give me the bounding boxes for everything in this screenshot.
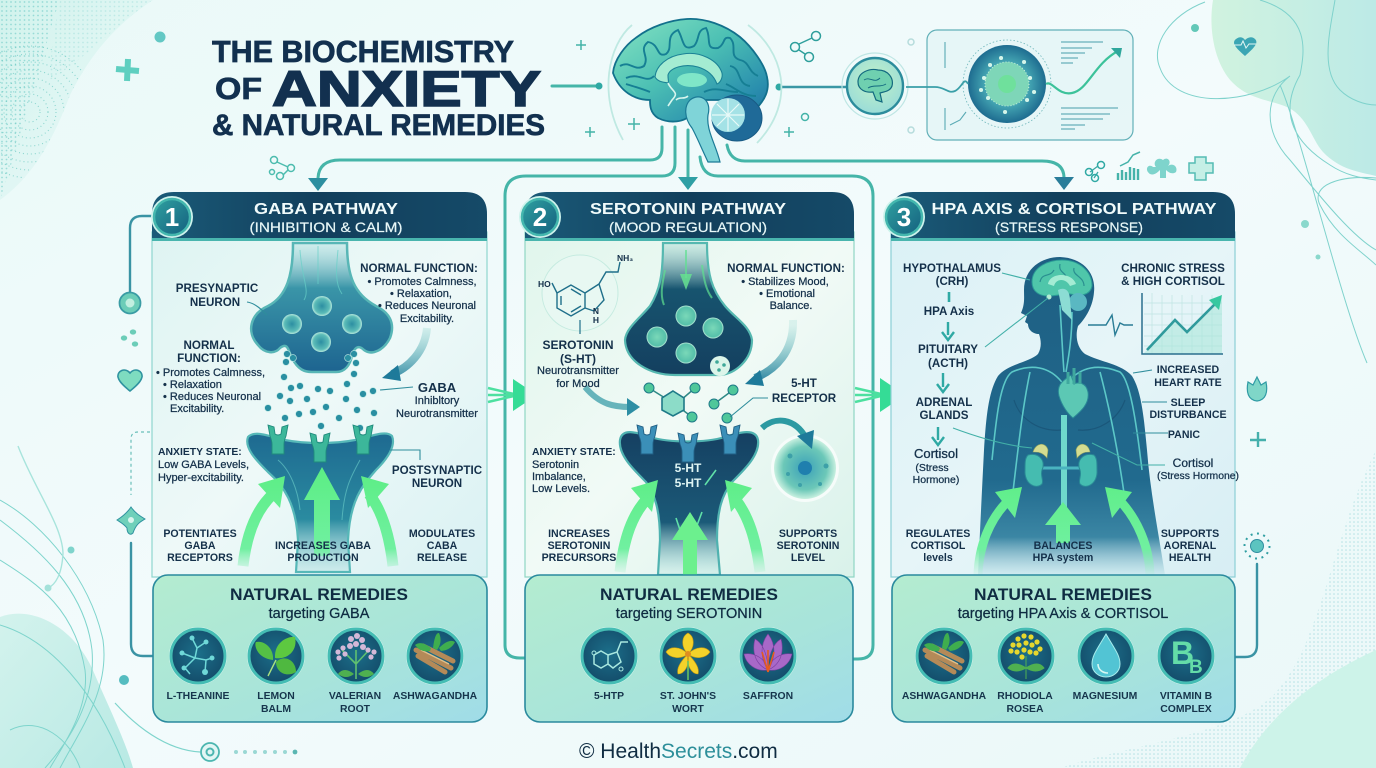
number badge 1	[151, 196, 193, 238]
arrow: panel 1 to panel 2	[488, 379, 537, 411]
remedy arrows	[978, 487, 1150, 575]
left normal function text: • Reduces Neuronal	[163, 391, 261, 403]
remedy action labels: SUPPORTS	[1161, 528, 1219, 540]
anxiety state text	[532, 447, 616, 495]
remedy action labels: CABA	[427, 540, 458, 552]
HPA axis steps: Cortisol	[914, 446, 958, 461]
panel header: GABA PATHWAY	[254, 201, 398, 218]
symptom labels: DISTURBANCE	[1149, 409, 1227, 421]
presynaptic label	[176, 282, 267, 315]
left normal function text: • Promotes Calmness,	[156, 367, 265, 379]
number badge 2	[519, 196, 561, 238]
left normal function text: NORMAL	[184, 339, 234, 352]
remedy action labels: RELEASE	[417, 552, 467, 564]
serotonin molecules	[644, 383, 738, 423]
remedy arrows	[243, 467, 393, 566]
icon: 5-HTP	[580, 627, 638, 685]
number badge 3	[883, 196, 925, 238]
postsynaptic label: POSTSYNAPTIC	[392, 464, 483, 477]
symptom labels	[1133, 364, 1239, 482]
panel header: (INHIBITION & CALM)	[250, 219, 402, 235]
natural remedies box GABA: ASHWAGANDHA	[393, 691, 478, 702]
symptom labels: HEART RATE	[1154, 377, 1222, 389]
remedy action labels: PRECURSORS	[542, 552, 616, 564]
remedy action labels: BALANCES	[1034, 540, 1092, 552]
remedy action labels	[906, 528, 1219, 564]
natural remedies box HPA: MAGNESIUM	[1073, 691, 1137, 702]
panel: HPA axis and cortisol pathway	[883, 192, 1239, 722]
left normal function text: Excitability.	[170, 403, 224, 415]
5-HT receptor label: RECEPTOR	[772, 392, 837, 405]
left normal function text	[156, 339, 265, 415]
natural remedies box serotonin: 5-HTP	[594, 691, 624, 702]
icon: rhodiola rosea	[997, 627, 1055, 685]
leader lines	[953, 273, 1165, 465]
GABA label: GABA	[418, 380, 457, 395]
HPA axis steps: (CRH)	[936, 275, 969, 288]
remedy action labels: LEVEL	[791, 552, 826, 564]
HPA axis steps: (ACTH)	[928, 357, 968, 370]
natural remedies box serotonin	[525, 575, 853, 722]
HPA axis steps: (Stress	[915, 462, 949, 474]
remedy action labels: CORTISOL	[911, 540, 966, 552]
HPA axis steps	[903, 262, 1001, 486]
5-HT label in neuron: 5-HT	[675, 461, 702, 475]
icon: ashwagandha	[915, 627, 973, 685]
symptom labels: (Stress Hormone)	[1157, 471, 1239, 482]
serotonin label	[537, 338, 619, 390]
natural remedies box serotonin: NATURAL REMEDIES	[600, 585, 778, 604]
bottom-left dotted ornament	[201, 743, 297, 761]
natural remedies box HPA	[892, 575, 1235, 722]
icon: saffron	[739, 627, 797, 685]
postsynaptic label: NEURON	[412, 477, 462, 490]
natural remedies box HPA: ROSEA	[1007, 704, 1044, 715]
flow arrow to GABA	[382, 328, 427, 381]
serotonin molecule: NH₃	[617, 253, 633, 263]
icon: magnesium	[1077, 627, 1135, 685]
panel header: (MOOD REGULATION)	[609, 219, 767, 235]
natural remedies box serotonin: SAFFRON	[743, 691, 793, 702]
anxiety state text: Low GABA Levels,	[158, 459, 249, 471]
normal function text: • Emotional	[759, 288, 815, 300]
5-HT label in neuron: 5-HT	[675, 476, 702, 490]
HPA axis steps: ADRENAL	[916, 396, 972, 409]
5-HT receptor label: 5-HT	[791, 377, 817, 390]
HPA axis steps: GLANDS	[920, 409, 969, 422]
serotonin receptors	[637, 425, 740, 462]
title: & NATURAL REMEDIES	[212, 109, 545, 142]
panel body	[891, 232, 1235, 577]
data card with cell and rising line	[906, 30, 1133, 140]
ECG trace	[1088, 315, 1133, 335]
HPA axis steps: HYPOTHALAMUS	[903, 262, 1001, 275]
remedy action labels	[542, 528, 839, 564]
connector lines from brain to pathways	[130, 82, 1257, 668]
normal function text	[727, 262, 845, 312]
natural remedies box serotonin: ST. JOHN'S	[660, 691, 716, 702]
normal function text: NORMAL FUNCTION:	[727, 262, 845, 275]
natural remedies box HPA: COMPLEX	[1160, 704, 1212, 715]
5-HT label in neuron	[675, 461, 702, 490]
GABA label: Neurotransmitter	[396, 408, 478, 420]
small icons above panel 3	[1086, 37, 1256, 181]
remedy action labels: REGULATES	[906, 528, 970, 540]
left normal function text: FUNCTION:	[177, 352, 241, 365]
title: THE BIOCHEMISTRY	[212, 35, 514, 69]
remedy action labels	[163, 528, 475, 564]
icon: network left of panel 1	[270, 156, 294, 180]
panel: GABA pathway	[151, 192, 487, 722]
natural remedies box GABA: ROOT	[340, 704, 371, 715]
remedy action labels: INCREASES GABA	[275, 540, 371, 552]
right normal function text: • Reduces Neuronal	[378, 300, 476, 312]
vessels	[992, 305, 1142, 530]
heart	[1058, 368, 1088, 418]
chronic stress heading: CHRONIC STRESS	[1121, 262, 1225, 275]
HPA axis steps: HPA Axis	[924, 305, 974, 318]
cell with recycling arrow	[762, 421, 839, 502]
natural remedies box serotonin: WORT	[672, 704, 705, 715]
remedy arrows	[620, 480, 760, 575]
remedy action labels: AORENAL	[1164, 540, 1217, 552]
normal function text: • Stabilizes Mood,	[741, 276, 829, 288]
serotonin molecule: H	[593, 315, 599, 325]
symptom labels: INCREASED	[1157, 364, 1220, 376]
chronic stress chart	[1142, 293, 1223, 354]
remedy action labels: HEALTH	[1169, 552, 1211, 564]
right normal function text: • Promotes Calmness,	[368, 276, 476, 288]
natural remedies box HPA: targeting HPA Axis & CORTISOL	[958, 606, 1168, 622]
natural remedies box serotonin: targeting SEROTONIN	[616, 606, 762, 622]
presynaptic neuron	[625, 243, 752, 376]
natural remedies box HPA: ASHWAGANDHA	[902, 691, 987, 702]
natural remedies box GABA	[153, 575, 487, 722]
flow arrows	[585, 320, 793, 416]
icon: ashwagandha	[406, 627, 464, 685]
brain in head	[1032, 260, 1092, 320]
anxiety state text: ANXIETY STATE:	[532, 447, 616, 458]
presynaptic label: PRESYNAPTIC	[176, 282, 259, 295]
serotonin molecule: HO	[538, 279, 551, 289]
GABA label	[380, 380, 478, 420]
remedy action labels: levels	[923, 552, 953, 564]
symptom labels: SLEEP	[1171, 397, 1205, 409]
symptom labels: PANIC	[1168, 429, 1200, 441]
natural remedies box GABA: VALERIAN	[329, 691, 381, 702]
5-HT receptor label	[730, 377, 837, 417]
natural remedies box GABA: L-THEANINE	[167, 691, 230, 702]
panel header	[891, 192, 1235, 241]
right normal function text: Excitability.	[400, 313, 454, 325]
anxiety state text	[158, 447, 249, 484]
GABA label: Inhibltory	[415, 395, 460, 407]
anxiety state text: Hyper-excitability.	[158, 472, 244, 484]
anxiety state text: Imbalance,	[532, 471, 586, 483]
serotonin molecule: N	[593, 306, 599, 316]
panel header: (STRESS RESPONSE)	[995, 219, 1143, 235]
number badge 1: 1	[165, 202, 179, 232]
remedy action labels: INCREASES	[548, 528, 610, 540]
remedy action labels: HPA system	[1033, 552, 1093, 564]
natural remedies box GABA: LEMON	[257, 691, 295, 702]
remedy action labels: SEROTONIN	[548, 540, 610, 552]
serotonin molecule	[538, 253, 633, 334]
panel body	[152, 232, 487, 577]
remedy action labels: GABA	[184, 540, 216, 552]
icon: valerian root	[327, 627, 385, 685]
side icons right	[1244, 377, 1270, 558]
panel header	[525, 192, 854, 241]
title	[212, 35, 545, 142]
kidneys and adrenal glands	[1025, 444, 1097, 486]
serotonin label: for Mood	[556, 378, 600, 390]
arrow: panel 2 to panel 3	[855, 378, 905, 412]
HPA axis steps: PITUITARY	[918, 343, 978, 356]
icon: small brain badge	[842, 53, 908, 119]
side icons left	[117, 292, 150, 534]
panel body	[525, 232, 854, 577]
remedy action labels: PRODUCTION	[287, 552, 359, 564]
title: ANXIETY	[272, 61, 541, 117]
natural remedies box HPA: NATURAL REMEDIES	[974, 585, 1152, 604]
icon: L-theanine	[169, 627, 227, 685]
right normal function text: • Relaxation,	[390, 288, 452, 300]
chronic stress heading	[1121, 262, 1225, 288]
natural remedies box GABA: targeting GABA	[269, 606, 370, 622]
natural remedies box HPA: RHODIOLA	[997, 691, 1053, 702]
natural remedies box HPA: VITAMIN B	[1160, 691, 1213, 702]
icon: vitamin B	[1157, 627, 1215, 685]
natural remedies box GABA: BALM	[261, 704, 291, 715]
title: OF	[215, 72, 262, 106]
number badge 2: 2	[533, 202, 547, 232]
serotonin label: Neurotransmitter	[537, 365, 619, 377]
decorative small symbols near the brain	[116, 32, 914, 137]
human body silhouette	[978, 257, 1165, 575]
anxiety state text: Serotonin	[532, 459, 579, 471]
icon: vitamin B: B	[1171, 635, 1194, 671]
remedy action labels: RECEPTORS	[167, 552, 233, 564]
serotonin label: (S-HT)	[560, 352, 596, 366]
icon: lemon balm	[247, 627, 305, 685]
panel header: SEROTONIN PATHWAY	[590, 201, 786, 218]
remedy action labels: MODULATES	[409, 528, 475, 540]
postsynaptic label	[390, 450, 483, 490]
chronic stress heading: & HIGH CORTISOL	[1121, 275, 1225, 288]
postsynaptic neuron	[620, 432, 758, 575]
presynaptic label: NEURON	[190, 296, 240, 309]
panel: serotonin pathway	[519, 192, 854, 722]
normal function text: Balance.	[770, 300, 812, 312]
number badge 3: 3	[897, 202, 911, 232]
panel header: HPA AXIS & CORTISOL PATHWAY	[932, 201, 1217, 218]
remedy action labels: POTENTIATES	[163, 528, 237, 540]
remedy action labels: SEROTONIN	[777, 540, 839, 552]
serotonin label: SEROTONIN	[542, 338, 614, 352]
remedy action labels: SUPPORTS	[779, 528, 837, 540]
presynaptic neuron	[251, 243, 392, 372]
postsynaptic neuron	[247, 433, 393, 572]
left normal function text: • Relaxation	[163, 379, 222, 391]
icon: brain	[608, 19, 781, 162]
footer brand: © HealthSecrets.com	[579, 740, 778, 763]
icon: vitamin B: B	[1189, 657, 1203, 678]
right normal function text: NORMAL FUNCTION:	[360, 262, 478, 275]
HPA axis steps: Hormone)	[913, 474, 959, 486]
GABA receptors	[268, 425, 373, 462]
natural remedies box GABA: NATURAL REMEDIES	[230, 585, 408, 604]
GABA neurotransmitter dots	[265, 351, 377, 431]
symptom labels: Cortisol	[1173, 456, 1213, 470]
anxiety state text: Low Levels.	[532, 483, 590, 495]
panel header	[152, 192, 487, 241]
icon: St John's wort	[659, 627, 717, 685]
anxiety state text: ANXIETY STATE:	[158, 447, 242, 458]
right normal function text	[360, 262, 478, 325]
